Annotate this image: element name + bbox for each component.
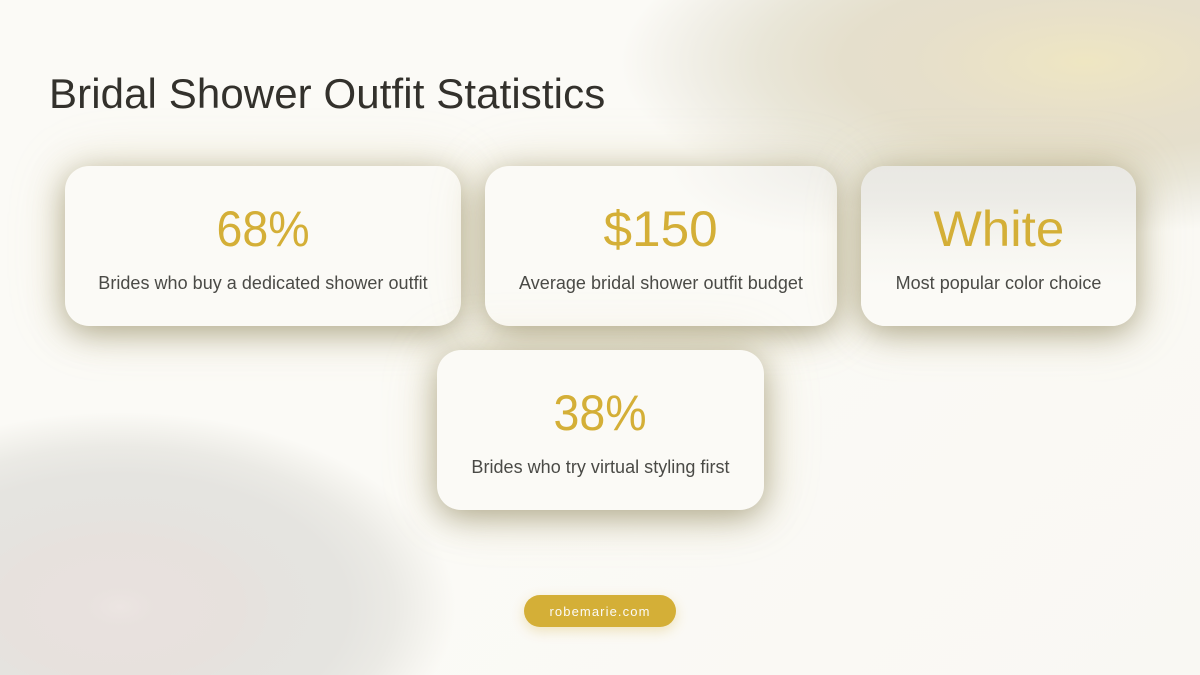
value: 38% [554, 385, 647, 441]
footer website badge [524, 595, 676, 627]
description: Average bridal shower outfit budget [519, 273, 803, 293]
value: $150 [604, 201, 718, 257]
stat card: 38% [437, 350, 764, 510]
footer website badge: robemarie.com [550, 604, 650, 619]
stat card: White [861, 166, 1136, 326]
value: White [933, 201, 1064, 257]
description: Brides who buy a dedicated shower outfit [98, 273, 428, 293]
stat card: 68% [65, 166, 461, 326]
title: Bridal Shower Outfit Statistics [49, 70, 605, 117]
stat card: $150 [485, 166, 837, 326]
value: 68% [216, 201, 310, 257]
description: Brides who try virtual styling first [471, 457, 730, 477]
description: Most popular color choice [896, 273, 1101, 293]
